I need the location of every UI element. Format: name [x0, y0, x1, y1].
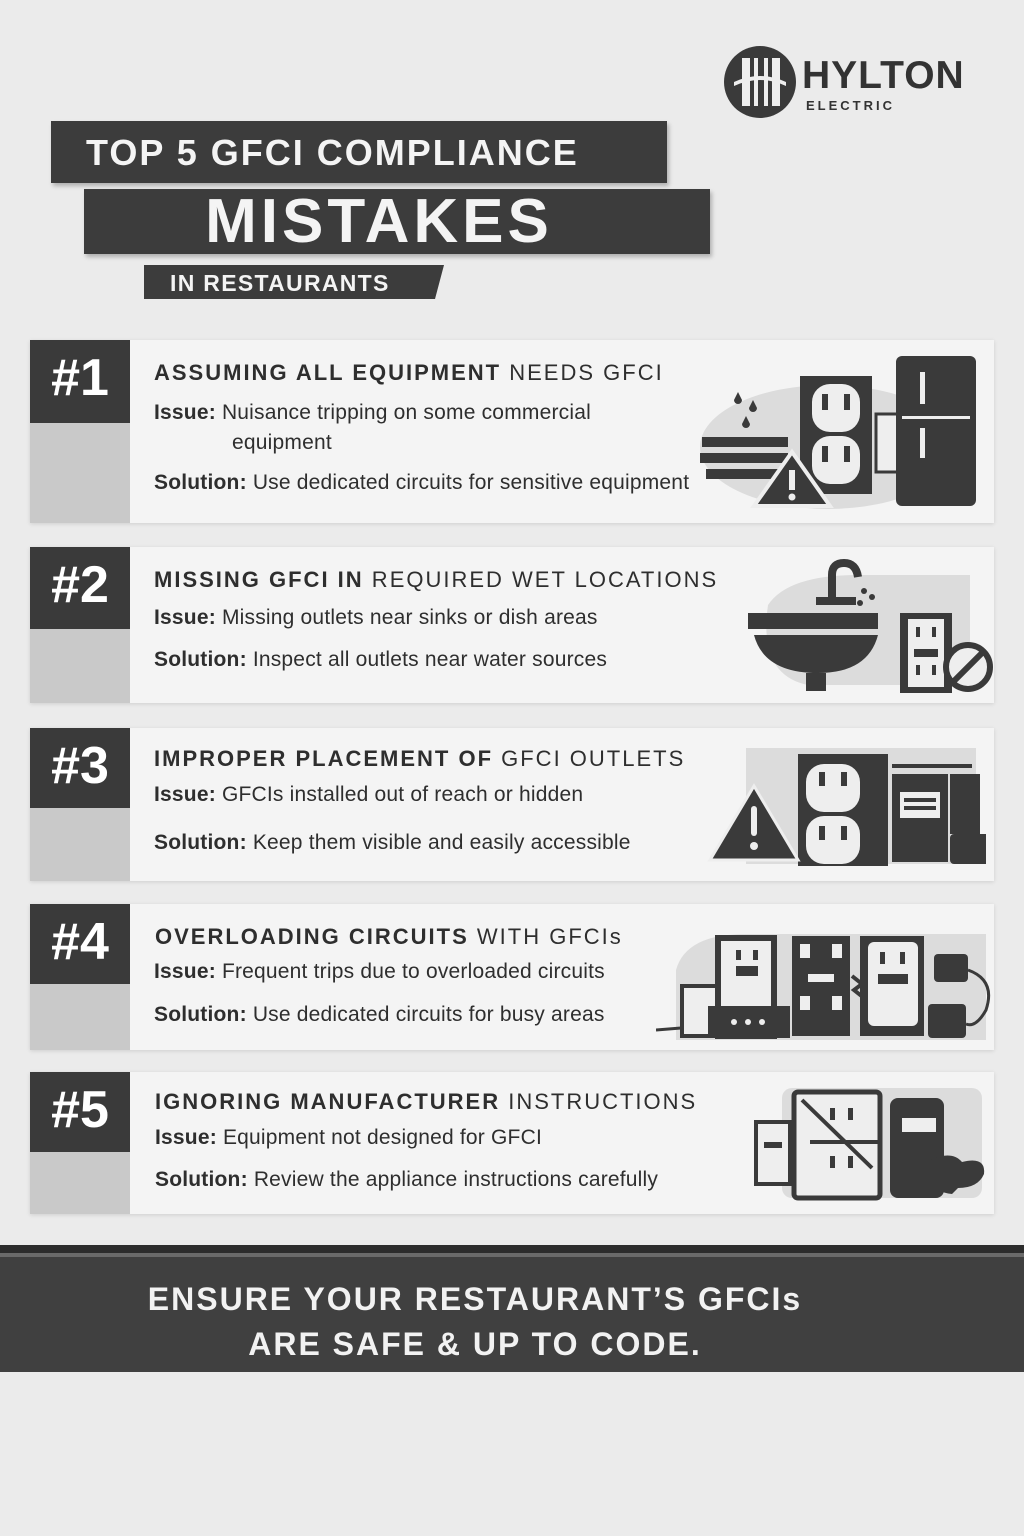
- icon: outlet, manual, appliance: [754, 1088, 984, 1200]
- card 2: [30, 547, 994, 703]
- number 2: #2: [51, 556, 109, 614]
- issue 5: Issue: Equipment not designed for GFCI: [155, 1126, 542, 1149]
- card 4: [30, 904, 994, 1050]
- card 5: [30, 1072, 994, 1214]
- icon: sink and outlet: [748, 559, 993, 693]
- card 1: [30, 340, 994, 523]
- icon: outlets, fridge, warning: [700, 356, 976, 509]
- icon: warning, outlet, equipment: [712, 748, 986, 866]
- solution 4: Solution: Use dedicated circuits for busy areas: [154, 1003, 605, 1026]
- footer text: ARE SAFE & UP TO CODE.: [248, 1326, 702, 1362]
- number 5: [30, 1072, 130, 1214]
- number 1: [30, 340, 130, 523]
- title line 1: TOP 5 GFCI COMPLIANCE: [86, 132, 579, 173]
- number 3: #3: [51, 737, 109, 795]
- footer banner: [0, 1245, 1024, 1372]
- logo: [724, 46, 965, 118]
- issue 2: Issue: Missing outlets near sinks or dish areas: [154, 606, 598, 629]
- issue 1: [154, 401, 591, 454]
- number 1: #1: [51, 349, 109, 407]
- solution 5: Solution: Review the appliance instructions carefully: [155, 1168, 658, 1191]
- number 4: #4: [51, 913, 109, 971]
- heading 4: OVERLOADING CIRCUITS WITH GFCIs: [155, 924, 623, 949]
- issue 4: Issue: Frequent trips due to overloaded circuits: [154, 960, 605, 983]
- heading 2: MISSING GFCI IN REQUIRED WET LOCATIONS: [154, 567, 718, 592]
- number 5: #5: [51, 1081, 109, 1139]
- card 3: [30, 728, 994, 881]
- solution 2: Solution: Inspect all outlets near water sources: [154, 648, 607, 671]
- heading 5: IGNORING MANUFACTURER INSTRUCTIONS: [155, 1089, 697, 1114]
- number 2: [30, 547, 130, 703]
- title line 2: MISTAKES: [205, 187, 553, 256]
- icon: overloaded outlets: [656, 934, 990, 1040]
- issue 1: equipment: [232, 431, 332, 454]
- solution 1: Solution: Use dedicated circuits for sensitive equipment: [154, 471, 689, 494]
- footer text: ENSURE YOUR RESTAURANT’S GFCIs: [148, 1281, 802, 1317]
- heading 3: IMPROPER PLACEMENT OF GFCI OUTLETS: [154, 746, 685, 771]
- footer text: [148, 1281, 802, 1362]
- number 3: [30, 728, 130, 881]
- number 4: [30, 904, 130, 1050]
- issue 1: Issue: Nuisance tripping on some commercial: [154, 401, 591, 424]
- title line 1: [51, 121, 667, 183]
- logo: ELECTRIC: [806, 98, 895, 113]
- solution 3: Solution: Keep them visible and easily accessible: [154, 831, 631, 854]
- title line 2: [84, 189, 710, 254]
- subtitle: IN RESTAURANTS: [170, 270, 390, 296]
- issue 3: Issue: GFCIs installed out of reach or hidden: [154, 783, 583, 806]
- heading 1: ASSUMING ALL EQUIPMENT NEEDS GFCI: [154, 360, 664, 385]
- subtitle: [144, 265, 444, 299]
- logo: HYLTON: [802, 54, 965, 97]
